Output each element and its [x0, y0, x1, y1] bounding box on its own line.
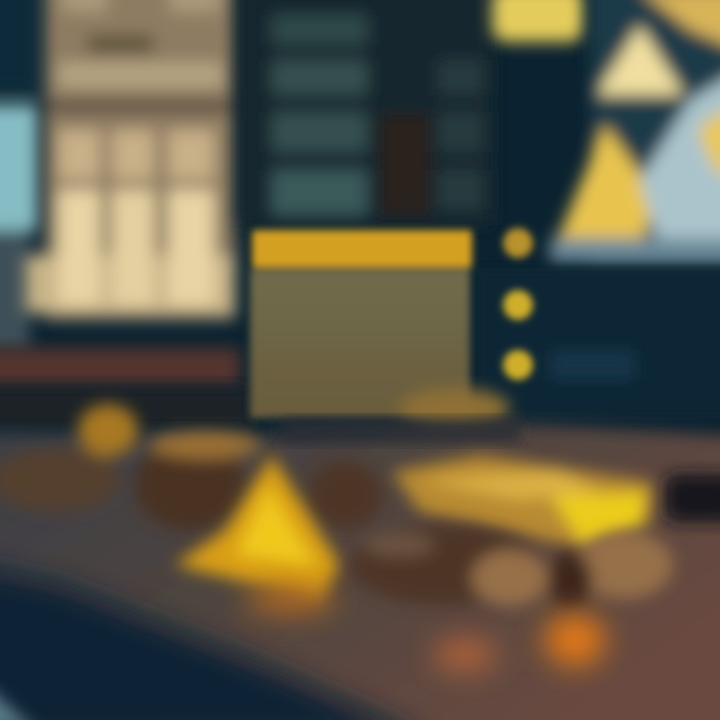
foreground dark edge [0, 565, 430, 720]
background: cream building [25, 0, 235, 320]
panel header bar [252, 230, 472, 268]
bullet dot 3 [503, 350, 533, 380]
gold pieces left [0, 404, 383, 530]
background: left window [0, 0, 42, 350]
gold nugget on panel edge [400, 388, 510, 428]
counter shelf [0, 348, 240, 386]
chart panel [250, 230, 472, 418]
faint text lines [550, 350, 635, 380]
background: dark navy wall [478, 268, 720, 420]
gold bar [392, 455, 652, 548]
lower gold nuggets [350, 525, 673, 608]
bullet dot 1 [503, 228, 533, 258]
panel body [250, 270, 470, 418]
background: dark central building [238, 0, 493, 225]
gold pyramid [175, 455, 340, 600]
orange reflections [245, 586, 605, 673]
bullet dot 2 [503, 290, 533, 320]
background: yellow lamp [492, 0, 584, 42]
background: right yellow and blue shapes [550, 0, 720, 265]
table surface [0, 424, 720, 720]
dark object right [665, 474, 720, 522]
